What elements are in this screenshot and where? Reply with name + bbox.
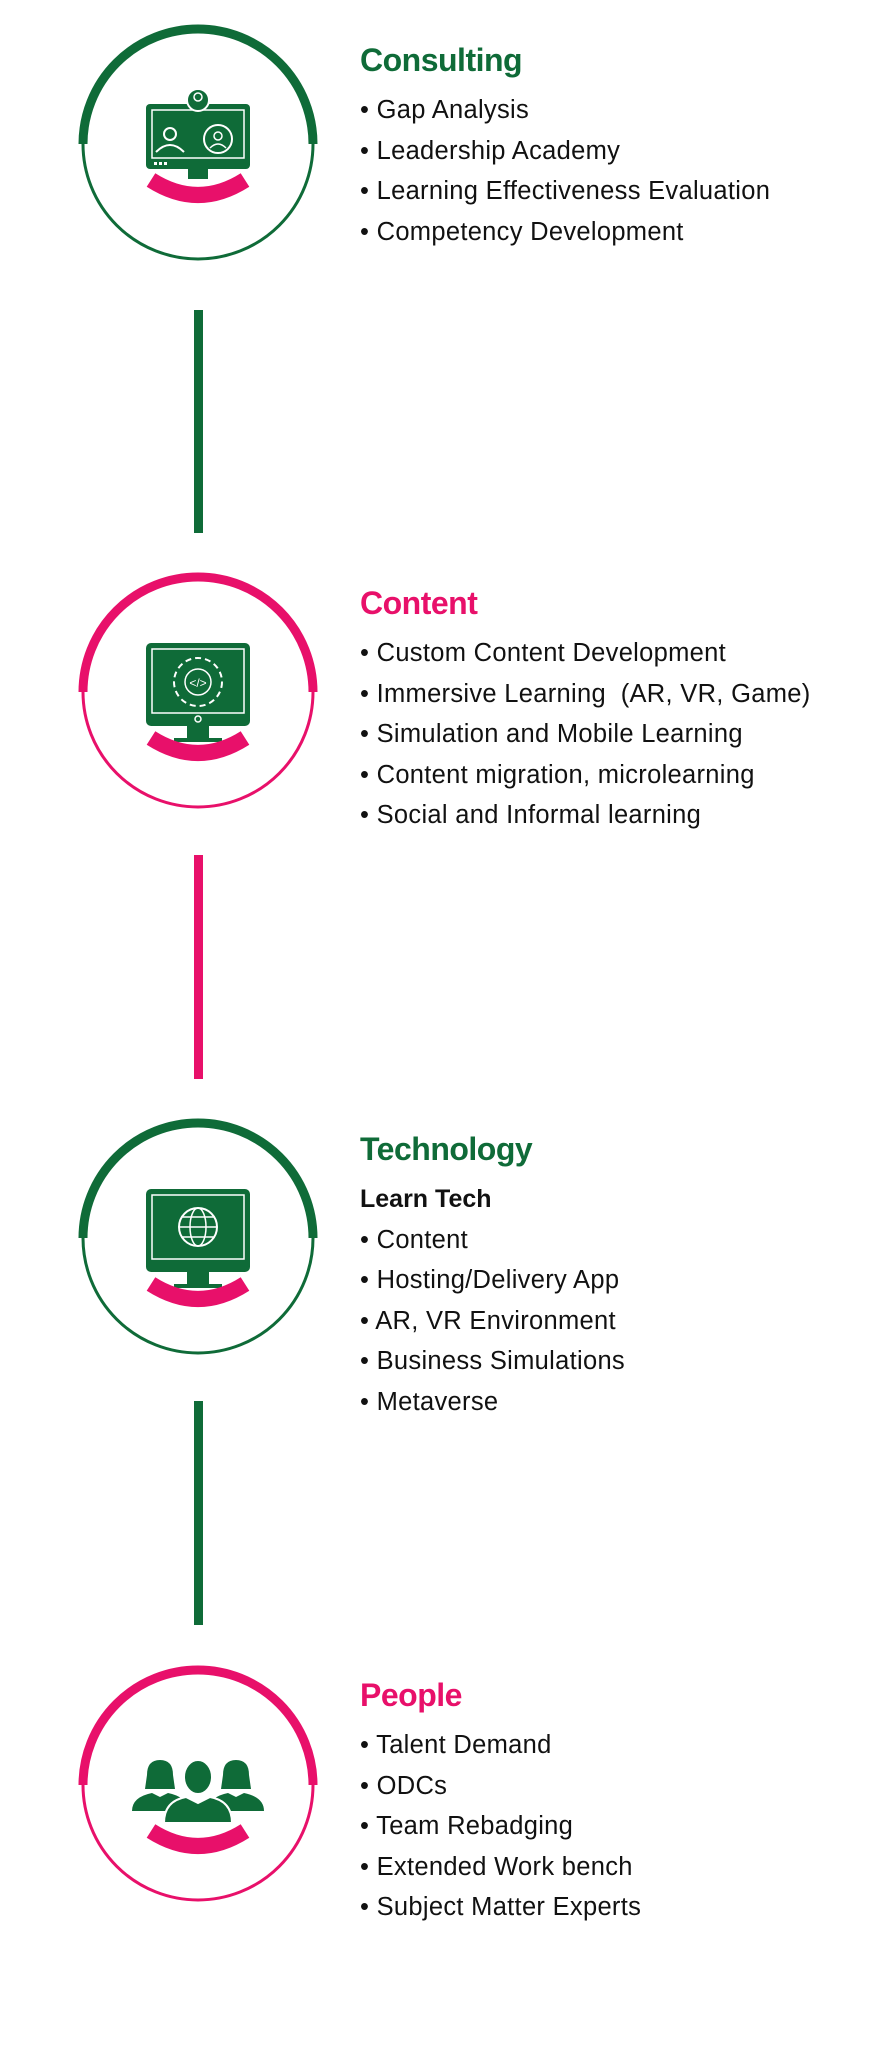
icon: team (132, 1760, 264, 1823)
text block: consulting: • Leadership Academy (360, 136, 620, 164)
node: people (83, 1670, 313, 1900)
text block: technology: • Metaverse (360, 1388, 498, 1416)
text block: consulting: • Gap Analysis (360, 96, 529, 124)
text block: technology (360, 1131, 625, 1416)
text block: people (360, 1677, 641, 1921)
text block: technology: Learn Tech (360, 1185, 492, 1213)
text block: content: • Custom Content Development (360, 639, 726, 667)
text block: people: People (360, 1677, 462, 1713)
text block: consulting: • Learning Effectiveness Evaluation (360, 177, 770, 205)
node: content (83, 577, 313, 807)
node: technology (83, 1123, 313, 1353)
text block: content: • Immersive Learning (AR, VR, Game) (360, 680, 811, 708)
text block: technology: • Hosting/Delivery App (360, 1266, 619, 1294)
icon: monitor with gear: </> (189, 676, 207, 690)
connector 3 (194, 1401, 203, 1625)
text block: technology: • AR, VR Environment (360, 1306, 616, 1334)
text block: content: • Simulation and Mobile Learning (360, 720, 743, 748)
icon: video conference (146, 89, 250, 179)
text block: consulting: Consulting (360, 42, 522, 78)
connector 2 (194, 855, 203, 1079)
text block: technology: Technology (360, 1131, 532, 1167)
text block: content: • Social and Informal learning (360, 801, 701, 829)
connector 1 (194, 310, 203, 533)
text block: content: Content (360, 585, 477, 621)
text block: people: • Subject Matter Experts (360, 1893, 641, 1921)
node: consulting (83, 29, 313, 259)
text block: people: • ODCs (360, 1772, 447, 1800)
text block: technology: • Content (360, 1226, 468, 1254)
text block: content: • Content migration, microlearning (360, 760, 755, 788)
icon: monitor with globe (146, 1189, 250, 1288)
text block: people: • Team Rebadging (360, 1812, 573, 1840)
text block: content (360, 585, 811, 829)
text block: people: • Talent Demand (360, 1731, 552, 1759)
text block: technology: • Business Simulations (360, 1347, 625, 1375)
icon: monitor with gear (146, 643, 250, 742)
text block: people: • Extended Work bench (360, 1852, 633, 1880)
text block: consulting: • Competency Development (360, 218, 684, 246)
text block: consulting (360, 42, 770, 246)
